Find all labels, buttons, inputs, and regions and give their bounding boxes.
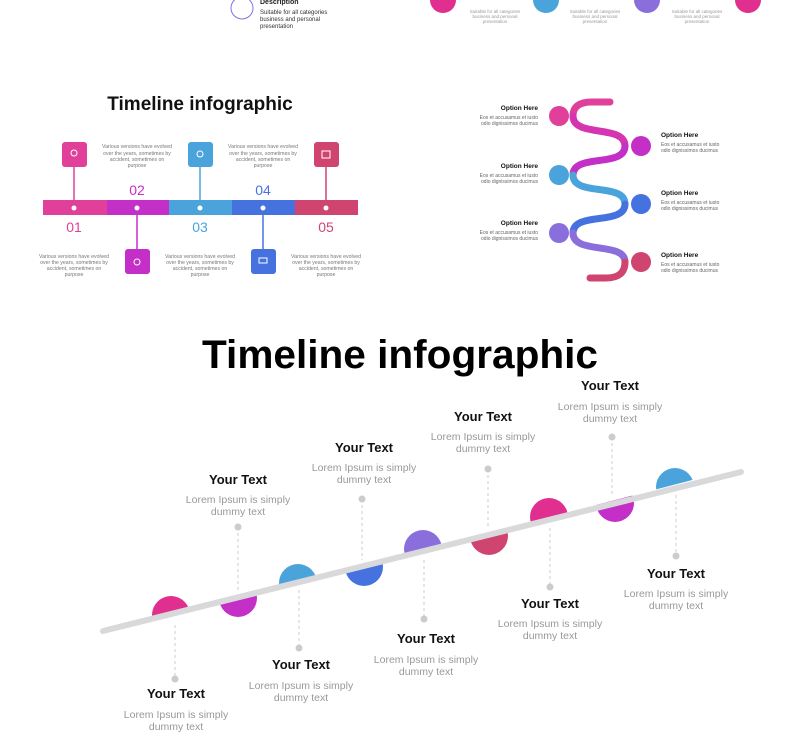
right panel: snake timeline: Eos et accusamus et iusto [661, 200, 720, 206]
right panel: snake timeline: Option Here [501, 220, 538, 227]
labels: Lorem Ipsum is simply [374, 654, 479, 666]
right panel: snake timeline: odio dignissimos ducimus [661, 268, 718, 274]
labels: Your Text [397, 631, 456, 646]
labels: dummy text [399, 666, 453, 678]
top strip: cropped description cards: presentation [583, 19, 608, 24]
descriptions: accident, sometimes on [110, 157, 164, 163]
right panel: snake timeline: Eos et accusamus et iusto [480, 230, 538, 236]
right panel: snake timeline: odio dignissimos ducimus [481, 121, 538, 127]
top strip: cropped description cards: business and personal [260, 17, 320, 23]
right panel: snake timeline: Eos et accusamus et iusto [661, 142, 720, 148]
labels: dummy text [149, 721, 203, 733]
diagonal timeline [103, 468, 741, 634]
labels: dummy text [211, 506, 265, 518]
labels: dummy text [274, 692, 328, 704]
top strip: cropped description cards: presentation [483, 19, 508, 24]
numbers: 04 [255, 182, 271, 198]
labels: dummy text [649, 600, 703, 612]
right panel: snake timeline: odio dignissimos ducimus [481, 236, 538, 242]
labels: Your Text [272, 657, 331, 672]
top strip: cropped description cards: Suitable for all categories [570, 9, 621, 14]
labels: Your Text [454, 409, 513, 424]
descriptions: purpose [191, 272, 209, 278]
numbers: 03 [192, 219, 208, 235]
descriptions [39, 144, 361, 278]
labels: dummy text [456, 443, 510, 455]
half circles above line [152, 468, 693, 616]
descriptions: accident, sometimes on [173, 266, 227, 272]
connectors [172, 434, 680, 682]
descriptions: Various versions have evolved [39, 254, 109, 260]
labels: Lorem Ipsum is simply [558, 401, 663, 413]
right panel: snake timeline [480, 102, 720, 278]
numbers: 02 [129, 182, 145, 198]
top strip: cropped description cards: Suitable for all categories [470, 9, 521, 14]
descriptions: accident, sometimes on [236, 157, 290, 163]
descriptions: accident, sometimes on [299, 266, 353, 272]
labels: Your Text [147, 686, 206, 701]
right panel: snake timeline: Option Here [661, 190, 699, 197]
labels: dummy text [583, 413, 637, 425]
right panel: snake timeline: odio dignissimos ducimus [661, 148, 718, 154]
labels: Lorem Ipsum is simply [249, 680, 354, 692]
labels: Lorem Ipsum is simply [431, 431, 536, 443]
top strip: cropped description cards: business and personal [674, 14, 720, 19]
right panel: snake timeline: Option Here [661, 252, 699, 259]
descriptions: accident, sometimes on [47, 266, 101, 272]
right panel: snake timeline: Option Here [661, 132, 699, 139]
labels [124, 378, 729, 733]
bar [43, 200, 358, 215]
descriptions: Various versions have evolved [291, 254, 361, 260]
right panel: snake timeline: Eos et accusamus et iusto [480, 173, 538, 179]
descriptions: purpose [254, 163, 272, 169]
top strip: cropped description cards: business and personal [472, 14, 518, 19]
half circles below line [219, 484, 634, 617]
descriptions: purpose [128, 163, 146, 169]
descriptions: Various versions have evolved [102, 144, 172, 150]
right panel: snake timeline: odio dignissimos ducimus [481, 179, 538, 185]
right panel: snake timeline: Option Here [501, 105, 538, 112]
top strip: cropped description cards: Suitable for all categories [260, 10, 327, 16]
descriptions: purpose [65, 272, 83, 278]
descriptions: over the years, sometimes by [292, 260, 360, 266]
numbers [66, 182, 334, 235]
labels: Lorem Ipsum is simply [186, 494, 291, 506]
labels: Your Text [581, 378, 640, 393]
descriptions: over the years, sometimes by [229, 151, 297, 157]
right panel: snake timeline: Eos et accusamus et iusto [480, 115, 538, 121]
top strip: cropped description cards: Suitable for all categories [672, 9, 723, 14]
main title: Timeline infographic [202, 333, 598, 377]
labels: dummy text [337, 474, 391, 486]
right panel: snake timeline: Option Here [501, 163, 538, 170]
descriptions: Various versions have evolved [228, 144, 298, 150]
labels: Your Text [335, 440, 394, 455]
labels: Lorem Ipsum is simply [124, 709, 229, 721]
labels: Your Text [647, 566, 706, 581]
top strip: cropped description cards: presentation [260, 24, 293, 30]
right panel: snake timeline: Eos et accusamus et iusto [661, 262, 720, 268]
top strip: cropped description cards [231, 0, 761, 30]
labels: Your Text [521, 596, 580, 611]
descriptions: over the years, sometimes by [103, 151, 171, 157]
descriptions: purpose [317, 272, 335, 278]
descriptions: Various versions have evolved [165, 254, 235, 260]
numbers: 01 [66, 219, 82, 235]
labels: Your Text [209, 472, 268, 487]
descriptions: over the years, sometimes by [40, 260, 108, 266]
left panel: horizontal timeline [39, 94, 361, 278]
top strip: cropped description cards: business and personal [572, 14, 618, 19]
heading: Timeline infographic [107, 94, 293, 115]
labels: Lorem Ipsum is simply [624, 588, 729, 600]
descriptions: over the years, sometimes by [166, 260, 234, 266]
icon boxes [62, 142, 339, 274]
labels: Lorem Ipsum is simply [312, 462, 417, 474]
top strip: cropped description cards: presentation [685, 19, 710, 24]
numbers: 05 [318, 219, 334, 235]
labels: Lorem Ipsum is simply [498, 618, 603, 630]
right panel: snake timeline: odio dignissimos ducimus [661, 206, 718, 212]
line [103, 472, 741, 631]
labels: dummy text [523, 630, 577, 642]
